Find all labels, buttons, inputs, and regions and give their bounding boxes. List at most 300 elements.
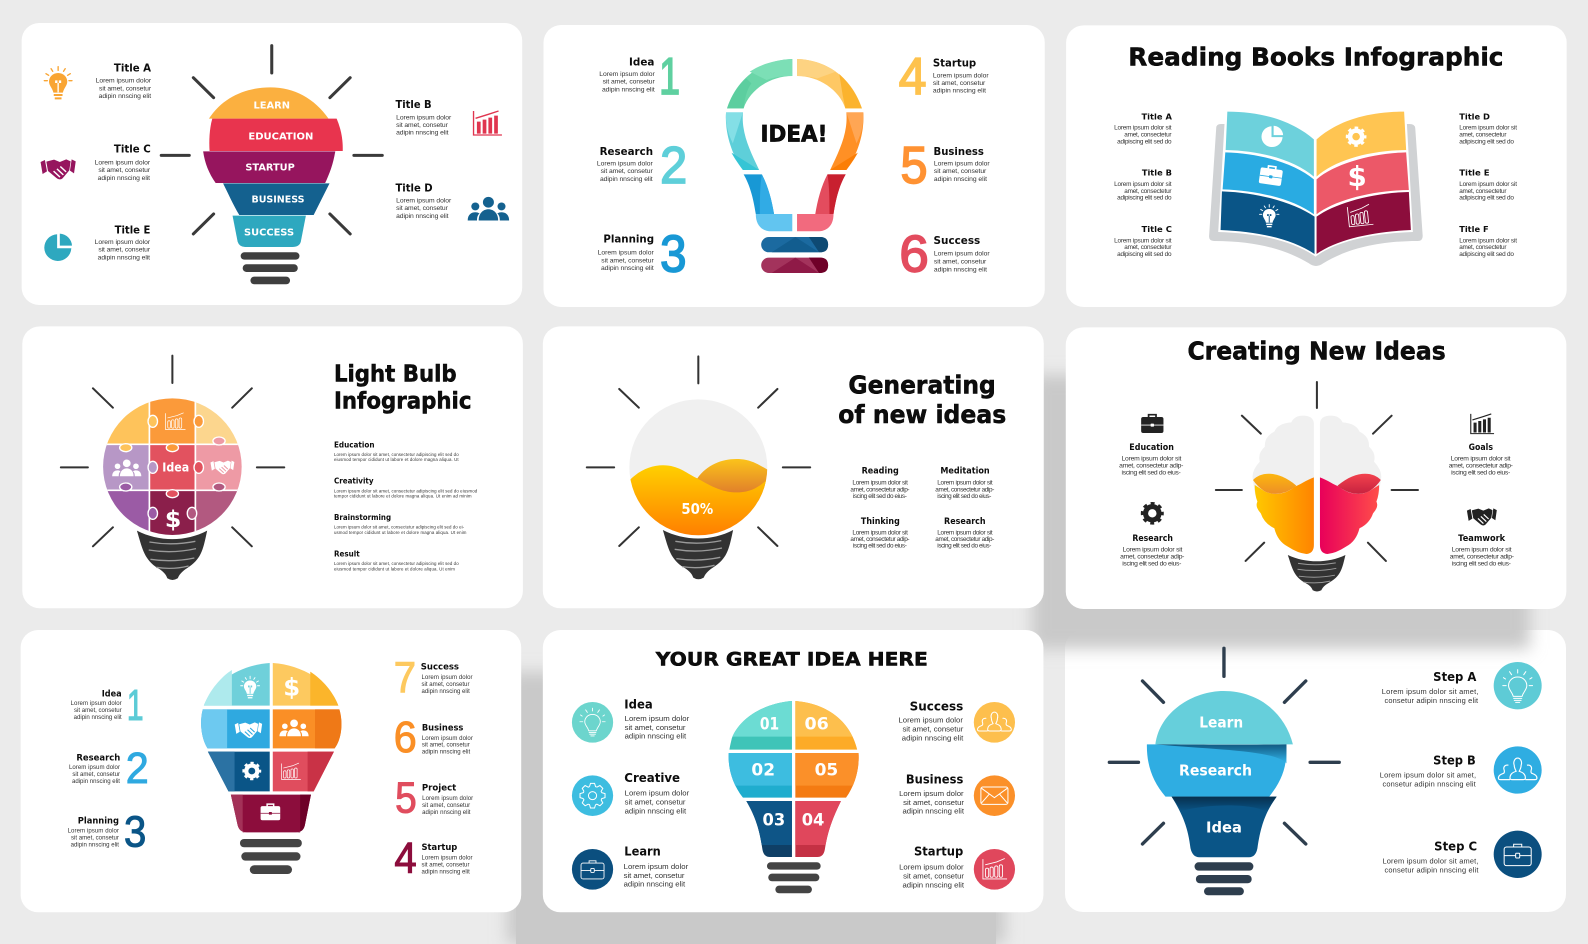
text block: startup: Lorem ipsum dolor: [421, 856, 473, 862]
text block: title B: [395, 99, 452, 137]
text block: title F: amet, consectetur: [1459, 244, 1507, 251]
text block: success: adipin nnscing elit: [421, 689, 470, 695]
panel: layered bulb with titles A-E: [22, 23, 522, 305]
bulb segment: idea: Idea: [1206, 820, 1242, 837]
text block: title B: sit amet, consetur: [396, 122, 449, 129]
text block: creative: Lorem ipsum dolor: [625, 789, 690, 798]
puzzle centre label: Idea: [162, 461, 189, 475]
bulb segment: red: [273, 752, 334, 791]
text block: goals: iscing elit sed do eius-: [1451, 470, 1510, 477]
text block: startup: Lorem ipsum dolor: [933, 72, 989, 79]
bulb segment: maroon: [231, 795, 311, 832]
text block: title C: Lorem ipsum dolor sit: [1114, 237, 1172, 244]
text block: title D: Lorem ipsum dolor: [396, 197, 452, 204]
text block: title B: Lorem ipsum dolor sit: [1114, 181, 1172, 188]
light rays: [1109, 648, 1339, 844]
icon: bulb: [1260, 205, 1279, 227]
icon: briefcase: [1141, 415, 1163, 433]
bulb segment: learn: Learn: [1199, 714, 1243, 731]
bulb segment 04: 04: [802, 810, 824, 830]
bulb screw base: [241, 252, 299, 284]
text block: brainstorming: Lorem ipsum dolor sit amet, consectetur adipiscing elit sed do ei-: [334, 525, 465, 530]
text block: business: adipin nnscing elit: [422, 750, 470, 756]
bulb segment 04: [795, 801, 841, 857]
text block: startup: sit amet, consetur: [903, 872, 964, 881]
text block: thinking: iscing elit sed do eius-: [853, 543, 907, 550]
text block: research: amet, consectetur adip-: [935, 536, 994, 543]
icon: people: [112, 460, 141, 476]
bulb segment: research: Research: [1179, 762, 1252, 779]
number 4: 4: [394, 835, 417, 883]
icon: people: [468, 197, 509, 221]
text block: title D: Title D: [395, 182, 433, 194]
bulb segment 03: [746, 801, 792, 857]
text block: title D: Lorem ipsum dolor sit: [1459, 125, 1517, 132]
text block: teamwork: amet, consectetur adip-: [1450, 554, 1514, 561]
text block: step A: [1382, 669, 1478, 705]
icon circle: envelope: [974, 775, 1015, 816]
text block: title D: adipiscing elit sed do: [1459, 138, 1514, 145]
text block: research: [69, 753, 120, 785]
text block: business: [422, 724, 473, 756]
text block: title C: Lorem ipsum dolor: [95, 159, 151, 166]
bulb socket: [1288, 555, 1345, 591]
text block: step A: consetur adipin nnscing elit: [1385, 696, 1478, 705]
bulb segment: orange: [273, 709, 341, 748]
text block: title D: Title D: [1459, 111, 1490, 121]
icon circle: people: [1494, 746, 1542, 794]
puzzle bulb: [101, 397, 243, 537]
text block: idea: sit amet, consetur: [603, 79, 655, 86]
text block: title A: amet, consectetur: [1124, 131, 1172, 138]
text block: education: [334, 439, 459, 462]
heading: Light Bulb: [334, 359, 457, 387]
text block: creative: Creative: [624, 771, 680, 785]
number 7: 7: [394, 655, 416, 702]
text block: research: [935, 517, 994, 550]
text block: idea: Idea: [624, 697, 653, 711]
text block: title D: [1459, 111, 1517, 145]
text block: title D: [395, 182, 452, 220]
text block: title E: Title E: [115, 224, 150, 236]
text block: title E: [95, 224, 151, 262]
panel: block bulb with numbers 1-7: [21, 630, 521, 912]
text block: project: adipin nnscing elit: [422, 810, 471, 816]
bulb segment: startup: STARTUP: [245, 162, 295, 173]
icon circle: briefcase: [572, 849, 613, 890]
text block: step B: Lorem ipsum dolor sit amet,: [1380, 771, 1476, 780]
text block: step C: [1382, 838, 1478, 875]
bulb screw base: [767, 862, 821, 893]
bulb segment 02: 02: [751, 759, 775, 779]
text block: planning: Lorem ipsum dolor: [598, 250, 654, 257]
icon circle: people: [974, 702, 1015, 743]
icon: chart: [281, 763, 301, 779]
text block: planning: sit amet, consetur: [601, 257, 654, 264]
text block: step A: Step A: [1433, 669, 1477, 684]
text block: teamwork: [1450, 534, 1514, 568]
icon: handshake: [1467, 508, 1497, 525]
bulb segment: idea: [1172, 797, 1277, 857]
text block: idea: adipin nnscing elit: [74, 715, 122, 721]
text block: reading: [850, 467, 910, 500]
text block: education: Education: [334, 439, 375, 449]
text block: learn: sit amet, consetur: [624, 871, 685, 880]
text block: result: eiusmod tempor cididunt ut labore et dolore aliqua. Ut enim: [334, 566, 455, 571]
text block: creative: adipin nnscing elit: [625, 806, 687, 815]
text block: title E: Lorem ipsum dolor: [95, 239, 151, 246]
text block: planning: sit amet, consetur: [71, 835, 119, 841]
text block: title C: adipin nnscing elit: [98, 175, 150, 182]
icon: people: [279, 720, 309, 736]
text block: step B: Step B: [1433, 752, 1476, 767]
text block: idea: Lorem ipsum dolor: [71, 701, 122, 707]
number 1: 1: [659, 48, 680, 106]
text block: startup: [899, 845, 965, 889]
text block: idea: [599, 57, 655, 93]
text block: research: Lorem ipsum dolor: [597, 160, 653, 167]
brain bulb: left hemisphere: [1253, 416, 1314, 554]
bulb segment: yellow: [273, 663, 338, 706]
text block: title A: adipin nnscing elit: [99, 93, 151, 100]
text block: business: sit amet, consetur: [422, 743, 470, 749]
text block: planning: Planning: [603, 233, 654, 245]
text block: creativity: Creativity: [334, 476, 374, 486]
icon circle: chart: [974, 849, 1015, 890]
text block: title B: [1114, 168, 1172, 202]
icon: bulb: [241, 676, 260, 698]
text block: title E: adipiscing elit sed do: [1459, 195, 1514, 202]
text block: startup: sit amet, consetur: [421, 863, 469, 869]
bulb segment: cyan left: [726, 112, 759, 170]
text block: title D: amet, consectetur: [1459, 131, 1507, 138]
text block: project: sit amet, consetur: [422, 803, 470, 809]
text block: teamwork: Lorem ipsum dolor sit: [1452, 547, 1512, 554]
panel background: bottom right slide: [1065, 630, 1566, 912]
text block: reading: amet, consectetur adip-: [850, 486, 910, 493]
text block: research: iscing elit sed do eius-: [937, 543, 991, 550]
heading: Generating: [848, 370, 996, 399]
text block: title A: Title A: [114, 62, 151, 74]
icon: pie chart: [1261, 126, 1283, 147]
text block: startup: sit amet, consetur: [933, 80, 986, 87]
open book illustration: [1209, 110, 1423, 266]
text block: teamwork: iscing elit sed do eius-: [1452, 561, 1511, 568]
text block: research: [1120, 534, 1184, 568]
text block: education: iscing elit sed do eius-: [1122, 470, 1181, 477]
text block: title C: sit amet, consetur: [98, 167, 151, 174]
text block: title B: Lorem ipsum dolor: [396, 114, 452, 121]
icon: pie chart: [44, 234, 72, 261]
text block: title F: Lorem ipsum dolor sit: [1459, 237, 1517, 244]
text block: startup: adipin nnscing elit: [421, 870, 470, 876]
text block: meditation: amet, consectetur adip-: [935, 486, 994, 493]
icon: gear: [1142, 504, 1162, 523]
text block: business: Lorem ipsum dolor: [934, 160, 990, 167]
number 3: 3: [124, 809, 146, 857]
heading: [334, 359, 472, 414]
text block: research: Research: [1132, 534, 1173, 544]
text block: planning: Lorem ipsum dolor: [68, 828, 119, 834]
text block: title A: adipiscing elit sed do: [1117, 138, 1172, 145]
number 3: 3: [660, 226, 686, 284]
text block: title A: Lorem ipsum dolor sit: [1114, 125, 1172, 132]
icon circle: bulb: [572, 702, 613, 743]
text block: planning: adipin nnscing elit: [601, 265, 654, 272]
text block: idea: Idea: [102, 690, 122, 700]
heading: YOUR GREAT IDEA HERE: [655, 650, 928, 671]
text block: title F: [1459, 224, 1517, 258]
text block: title B: Title B: [395, 99, 432, 111]
card shadow behind lower centre slide: [507, 672, 1005, 944]
text block: title A: sit amet, consetur: [99, 85, 152, 92]
text block: step C: Step C: [1434, 838, 1477, 853]
panel: your great idea here: [543, 630, 1043, 912]
bulb segment: red lower right: [797, 174, 846, 231]
book page: maroon: [1317, 192, 1411, 254]
light rays: [161, 46, 382, 234]
text block: success: Lorem ipsum dolor: [934, 251, 990, 258]
text block: planning: adipin nnscing elit: [71, 842, 119, 848]
heading: Reading Books Infographic: [1128, 43, 1503, 72]
text block: title C: Title C: [1141, 224, 1172, 234]
bulb segment: green top left: [727, 59, 792, 108]
text block: creative: sit amet, consetur: [625, 798, 686, 807]
text block: step C: consetur adipin nnscing elit: [1385, 866, 1478, 875]
text block: education: Lorem ipsum dolor sit amet, consectetur adipiscing elit sed do: [334, 452, 459, 457]
text block: title E: amet, consectetur: [1459, 188, 1507, 195]
text block: success: adipin nnscing elit: [934, 266, 987, 273]
bulb segment: learn: LEARN: [253, 101, 290, 112]
panel: puzzle light bulb infographic: [22, 326, 523, 608]
text block: success: Success: [910, 699, 963, 713]
text block: education: Education: [1129, 443, 1174, 453]
text block: title E: adipin nnscing elit: [98, 255, 150, 262]
text block: goals: amet, consectetur adip-: [1449, 463, 1513, 470]
text block: thinking: [850, 517, 910, 550]
text block: title A: Lorem ipsum dolor: [96, 78, 152, 85]
icon: dollar: $: [165, 505, 181, 533]
bulb segment: learn: [209, 87, 329, 119]
text block: idea: sit amet, consetur: [625, 723, 686, 732]
text block: title C: amet, consectetur: [1124, 244, 1172, 251]
text block: creativity: [334, 476, 478, 499]
text block: creative: [624, 771, 690, 815]
text block: business: [899, 773, 965, 816]
text block: idea: adipin nnscing elit: [602, 86, 655, 93]
text block: title E: Title E: [1459, 168, 1490, 178]
text block: success: Lorem ipsum dolor: [421, 675, 473, 681]
text block: title D: adipin nnscing elit: [396, 213, 449, 220]
text block: creativity: tempor cididunt ut labore et dolore magna aliqua. Ut enim ad minim: [334, 494, 472, 499]
text block: title B: adipin nnscing elit: [396, 130, 449, 137]
text block: business: Business: [422, 724, 463, 734]
panel: learn research idea bulb: [1109, 648, 1542, 895]
text block: title E: sit amet, consetur: [98, 247, 151, 254]
text block: idea: Lorem ipsum dolor: [599, 71, 655, 78]
bulb segment 02: [729, 753, 792, 798]
text block: research: amet, consectetur adip-: [1120, 554, 1184, 561]
text block: brainstorming: usmod tempor cididunt ut labore et dolore magna aliqua. Ut enim: [334, 530, 467, 535]
text block: success: sit amet, consetur: [934, 258, 987, 265]
bulb label: IDEA!: [761, 121, 827, 147]
text block: success: [421, 663, 473, 695]
text block: idea: Lorem ipsum dolor: [625, 714, 690, 723]
text block: step B: consetur adipin nnscing elit: [1382, 780, 1476, 789]
text block: goals: [1449, 443, 1513, 477]
text block: startup: Startup: [421, 843, 458, 853]
bulb segment: navy: [208, 752, 270, 791]
bulb segment 01: [729, 701, 792, 750]
text block: title B: amet, consectetur: [1124, 188, 1172, 195]
text block: business: Business: [906, 773, 963, 787]
text block: research: adipin nnscing elit: [600, 176, 653, 183]
fill level bulb: [630, 400, 768, 536]
panel: creating new ideas: [1066, 327, 1566, 609]
text block: title B: Title B: [1142, 168, 1172, 178]
bulb socket: [137, 531, 207, 580]
text block: education: amet, consectetur adip-: [1119, 463, 1183, 470]
text block: reading: iscing elit sed do eius-: [853, 493, 907, 500]
text block: research: Research: [76, 753, 120, 763]
text block: idea: Idea: [629, 57, 654, 69]
bulb segment: orange right: [830, 112, 863, 170]
text block: startup: Startup: [933, 57, 976, 69]
text block: business: Lorem ipsum dolor: [899, 789, 964, 798]
text block: title A: [96, 62, 152, 100]
bulb segment 06: [795, 701, 857, 750]
number 5: 5: [900, 137, 927, 195]
bulb socket: [663, 530, 733, 579]
text block: brainstorming: Brainstorming: [334, 512, 391, 522]
icon circle: gear: [572, 775, 613, 816]
bulb segment: learn: [1155, 691, 1293, 744]
text block: research: Lorem ipsum dolor sit: [1123, 547, 1183, 554]
icon: handshake: [41, 159, 76, 179]
text block: thinking: amet, consectetur adip-: [850, 536, 910, 543]
text block: success: sit amet, consetur: [902, 725, 964, 734]
icon: chart: [1471, 414, 1494, 434]
text block: startup: adipin nnscing elit: [933, 88, 986, 95]
text block: business: [934, 146, 990, 183]
light rays: [1216, 382, 1418, 561]
bulb base: blue bar: [761, 237, 828, 252]
book page: blue: [1223, 152, 1314, 214]
text block: idea: adipin nnscing elit: [625, 732, 687, 741]
icon: gear: [244, 763, 260, 779]
icon: dollar: $: [283, 674, 300, 702]
icon: dollar: $: [1347, 161, 1367, 193]
icon: chart: [1347, 204, 1373, 227]
icon: handshake: [235, 722, 262, 738]
text block: business: sit amet, consetur: [934, 168, 987, 175]
number 4: 4: [899, 48, 926, 106]
text block: goals: Goals: [1469, 443, 1493, 453]
bulb screw base: [1195, 862, 1253, 895]
card shadow behind middle right slide: [1032, 375, 1530, 649]
text block: success: adipin nnscing elit: [902, 733, 964, 742]
book page: navy: [1221, 191, 1315, 254]
text block: result: Result: [334, 549, 360, 559]
book page: teal: [1226, 112, 1314, 177]
bulb segment: business: [223, 183, 330, 215]
text block: planning: Planning: [78, 817, 119, 827]
text block: step A: Lorem ipsum dolor sit amet,: [1382, 687, 1478, 696]
text block: project: Lorem ipsum dolor: [422, 796, 473, 802]
text block: thinking: Lorem ipsum dolor sit: [852, 529, 908, 536]
text block: research: sit amet, consetur: [601, 168, 653, 175]
text block: success: Lorem ipsum dolor: [898, 716, 963, 725]
text block: step C: Lorem ipsum dolor sit amet,: [1382, 857, 1478, 866]
text block: startup: Startup: [914, 845, 964, 859]
text block: step B: [1380, 752, 1476, 789]
number 6: 6: [394, 714, 417, 762]
text block: thinking: Thinking: [861, 517, 900, 527]
icon circle: bulb: [1494, 662, 1542, 709]
bulb segment 03: 03: [763, 810, 785, 830]
heading: [838, 370, 1006, 429]
bulb segment: success: SUCCESS: [244, 227, 294, 238]
panel: generating of new ideas: [543, 326, 1044, 608]
text block: education: [1119, 443, 1183, 477]
panel: reading books infographic: [1066, 25, 1567, 307]
bulb segment: education: EDUCATION: [248, 132, 313, 143]
text block: title B: adipiscing elit sed do: [1117, 195, 1172, 202]
text block: title C: [1114, 224, 1172, 258]
bulb segment: startup: [203, 151, 335, 183]
text block: startup: adipin nnscing elit: [902, 880, 965, 889]
text block: title F: Title F: [1459, 224, 1489, 234]
text block: learn: Lorem ipsum dolor: [624, 862, 689, 871]
text block: meditation: [935, 467, 994, 500]
text block: business: Business: [934, 146, 984, 158]
text block: creativity: Lorem ipsum dolor sit amet, consectetur adipiscing elit sed do eiusmod: [334, 488, 478, 493]
heading: Infographic: [334, 386, 472, 414]
text block: meditation: Lorem ipsum dolor sit: [937, 480, 993, 487]
text block: meditation: Meditation: [940, 467, 990, 477]
icon: bulb: [44, 67, 72, 99]
text block: planning: [68, 817, 119, 848]
bulb segment: teal: [204, 663, 270, 706]
number 2: 2: [126, 745, 149, 793]
number 2: 2: [660, 137, 687, 195]
bulb segment 06: 06: [804, 713, 829, 733]
icon: gear: [1347, 128, 1365, 145]
icon: handshake: [210, 461, 234, 474]
light rays: [587, 356, 810, 546]
text block: startup: Lorem ipsum dolor: [899, 863, 964, 872]
icon: briefcase: [261, 804, 280, 820]
text block: research: Lorem ipsum dolor: [69, 765, 120, 771]
bulb segment: light blue: [201, 709, 270, 748]
bulb segment: education: [209, 119, 343, 151]
book page: yellow: [1317, 112, 1406, 177]
bulb base: maroon bar: [761, 258, 828, 273]
text block: result: [334, 549, 459, 571]
text block: title E: [1459, 168, 1517, 202]
icon: briefcase: [1259, 165, 1283, 186]
text block: brainstorming: [334, 512, 467, 535]
text block: title C: Title C: [114, 144, 151, 156]
text block: title E: Lorem ipsum dolor sit: [1459, 181, 1517, 188]
bulb segment: research: [1147, 744, 1286, 797]
icon: bar chart: [474, 111, 502, 135]
text block: idea: sit amet, consetur: [74, 708, 122, 714]
text block: learn: adipin nnscing elit: [624, 880, 686, 889]
heading: Creating New Ideas: [1187, 336, 1446, 365]
text block: title C: adipiscing elit sed do: [1117, 251, 1172, 258]
text block: project: [422, 784, 473, 816]
